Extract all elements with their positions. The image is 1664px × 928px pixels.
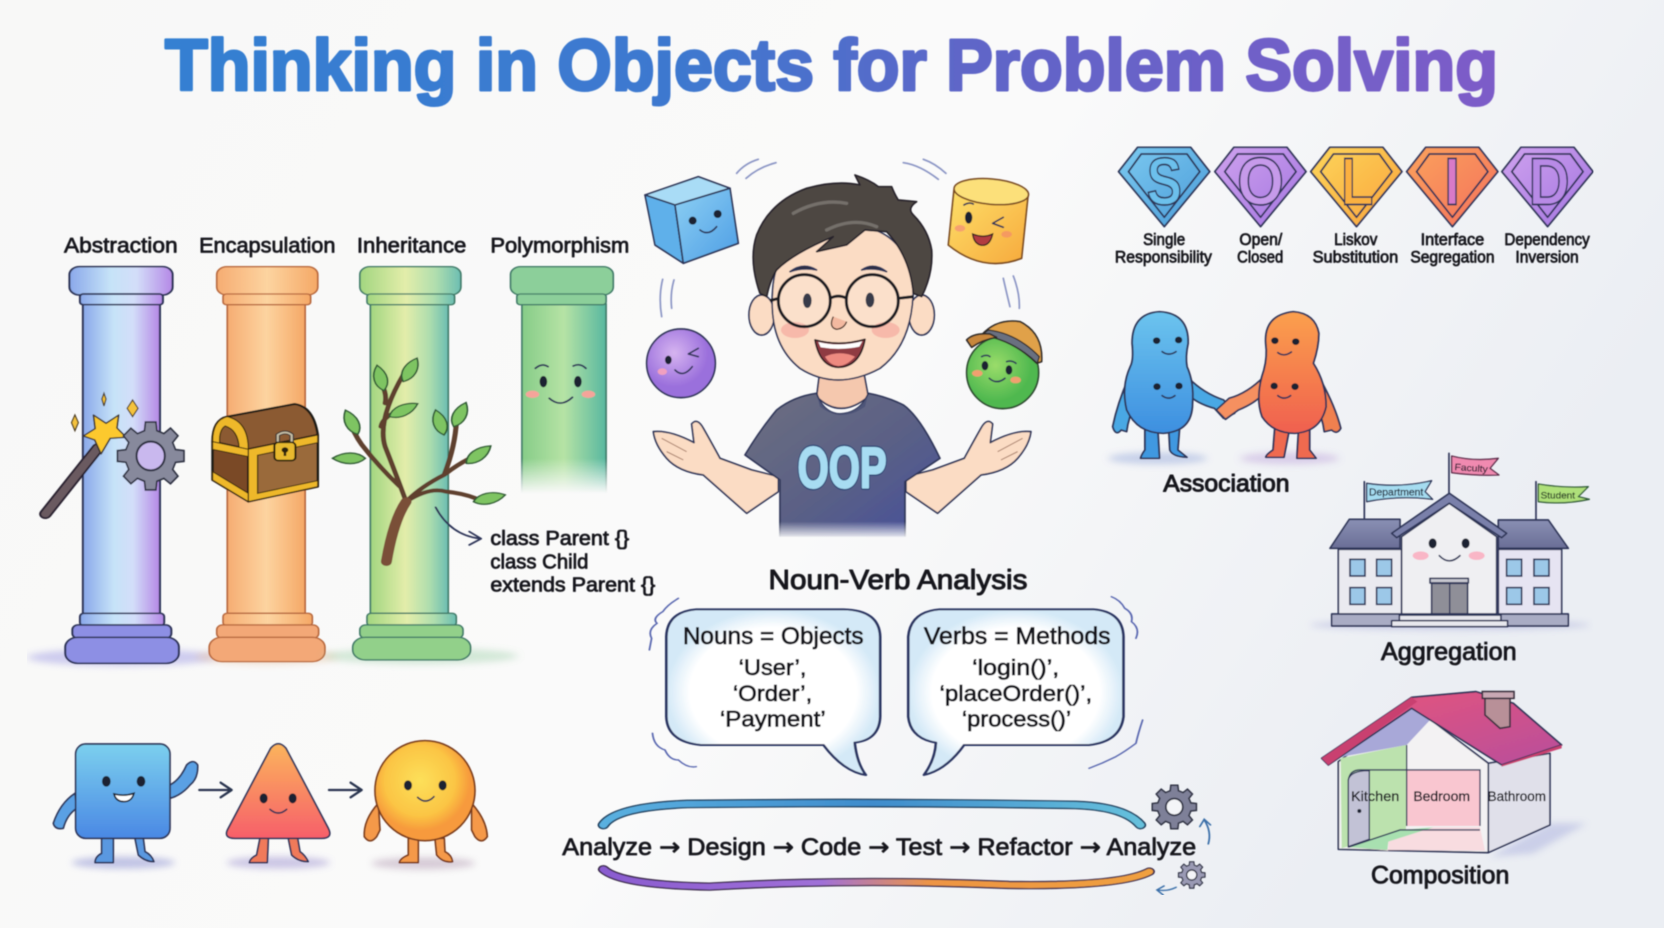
cycle ribbon: top xyxy=(603,803,1140,825)
icon: gear xyxy=(117,422,184,490)
speech bubble: nouns: Nouns = Objects xyxy=(683,623,864,650)
label: Dependency Inversion: Inversion xyxy=(1515,247,1579,266)
flag: Faculty xyxy=(1452,456,1499,475)
speech bubble: nouns xyxy=(666,609,880,775)
arrow: square to triangle xyxy=(199,783,232,797)
panel: four pillars of OOP xyxy=(27,234,655,666)
character: blue square xyxy=(53,744,198,869)
speech bubble: nouns: ‘Payment’ xyxy=(720,706,826,732)
label: Open/Closed: Closed xyxy=(1237,247,1283,266)
text: OOP xyxy=(798,437,887,501)
room label: Bathroom: Bathroom xyxy=(1488,788,1546,804)
character: arms and hands xyxy=(653,421,1031,513)
icon: growing tree xyxy=(333,356,507,562)
badge: D: D xyxy=(1529,145,1570,219)
badge: D xyxy=(1502,145,1593,227)
label: Single Responsibility: Responsibility xyxy=(1115,247,1212,266)
label: Dependency Inversion xyxy=(1504,230,1590,266)
text: development cycle: Analyze → Design → Code → Test → Refactor → Analyze xyxy=(562,833,1196,861)
character: head xyxy=(749,175,934,380)
speech bubble: nouns: ‘Order’, xyxy=(733,681,812,706)
heading: Noun-Verb Analysis: Noun-Verb Analysis xyxy=(769,564,1027,595)
speech bubble: verbs: ‘login()’, xyxy=(972,655,1059,680)
flag: Department xyxy=(1367,481,1433,502)
text: OOP: OOP xyxy=(798,437,887,501)
text: Abstraction: Abstraction xyxy=(64,234,178,258)
badge: O xyxy=(1215,145,1306,227)
flag: Department: Department xyxy=(1369,488,1424,499)
label: Single Responsibility: Single xyxy=(1143,230,1185,249)
code snippet: class Child xyxy=(490,550,588,573)
pillar: Encapsulation xyxy=(196,267,339,664)
text: Inheritance: Inheritance xyxy=(357,234,466,258)
badge: I xyxy=(1407,145,1498,227)
character: t-shirt xyxy=(745,393,940,538)
arrow: loop up xyxy=(1200,819,1210,844)
character: yellow circle xyxy=(364,741,487,869)
icon: smiling cube xyxy=(645,177,738,263)
cycle ribbon: bottom xyxy=(603,869,1149,887)
label: Open/Closed: Open/ xyxy=(1239,230,1282,249)
room label: Kitchen: Kitchen xyxy=(1351,788,1399,804)
icon: purple ball xyxy=(647,329,715,398)
speech bubble: verbs xyxy=(908,609,1123,775)
flag: Student xyxy=(1538,484,1589,503)
badge: O: O xyxy=(1237,145,1284,219)
character: neck xyxy=(817,370,868,408)
panel: aggregation and composition xyxy=(1310,453,1590,889)
icon: cutaway house xyxy=(1322,692,1587,857)
arrow: tree to code xyxy=(436,507,481,545)
code snippet xyxy=(490,527,655,596)
speech bubble: verbs: Verbs = Methods xyxy=(924,623,1110,650)
pillar: Polymorphism xyxy=(511,267,613,503)
badge: L: L xyxy=(1341,145,1373,219)
icon: magic wand with star xyxy=(45,393,138,514)
badge: S xyxy=(1119,145,1210,227)
heading: Association: Association xyxy=(1163,471,1290,497)
text: Polymorphism: Polymorphism xyxy=(490,234,629,258)
label: Liskov Substitution xyxy=(1313,230,1398,266)
icon: association figures shaking hands xyxy=(1108,312,1341,464)
text: Encapsulation: Encapsulation xyxy=(199,234,335,258)
panel: juggling programmer xyxy=(645,159,1042,538)
panel: morphing shape characters xyxy=(53,741,487,869)
text: OOP: OOP xyxy=(798,437,887,501)
arrow: triangle to circle xyxy=(329,783,362,797)
icon: green ball with cap xyxy=(967,321,1042,409)
flag: Student: Student xyxy=(1541,490,1575,500)
icon: winking cylinder xyxy=(948,176,1030,264)
badge: S: S xyxy=(1147,145,1182,219)
speech bubble: verbs: ‘placeOrder()’, xyxy=(940,681,1092,706)
icon: school building xyxy=(1310,453,1590,630)
icon: large gear xyxy=(1152,785,1196,829)
icon: small gear xyxy=(1179,862,1205,888)
motion lines xyxy=(660,159,1019,317)
label: Interface Segregation: Interface xyxy=(1421,230,1484,249)
room label: Bedroom: Bedroom xyxy=(1413,788,1470,804)
code snippet: extends Parent {} xyxy=(490,573,655,596)
character: orange triangle xyxy=(227,744,330,869)
badge: L xyxy=(1311,145,1402,227)
code snippet: class Parent {} xyxy=(490,527,629,549)
pillar: Abstraction xyxy=(27,267,217,666)
speech bubble: nouns: ‘User’, xyxy=(739,655,807,680)
label: Liskov Substitution: Substitution xyxy=(1313,247,1398,266)
pillar: Inheritance xyxy=(324,267,518,664)
title: Thinking in Objects for Problem Solving xyxy=(165,26,1498,106)
label: Interface Segregation: Segregation xyxy=(1410,247,1495,266)
badge: I: I xyxy=(1444,145,1460,219)
label: Liskov Substitution: Liskov xyxy=(1334,230,1378,249)
panel: noun-verb analysis and dev cycle xyxy=(562,564,1210,895)
speech bubble: verbs: ‘process()’ xyxy=(962,706,1071,732)
icon: treasure chest with lock xyxy=(213,404,318,502)
sketch squiggles around bubbles xyxy=(649,597,1143,768)
heading: Aggregation: Aggregation xyxy=(1381,639,1517,666)
label: Open/Closed xyxy=(1237,230,1283,266)
heading: Composition: Composition xyxy=(1371,862,1509,889)
panel: SOLID principles xyxy=(1108,145,1593,497)
label: Single Responsibility xyxy=(1115,230,1212,266)
arrow: loop back xyxy=(1157,886,1176,895)
flag: Faculty: Faculty xyxy=(1454,462,1488,474)
label: Interface Segregation xyxy=(1410,230,1495,266)
label: Dependency Inversion: Dependency xyxy=(1504,230,1590,249)
